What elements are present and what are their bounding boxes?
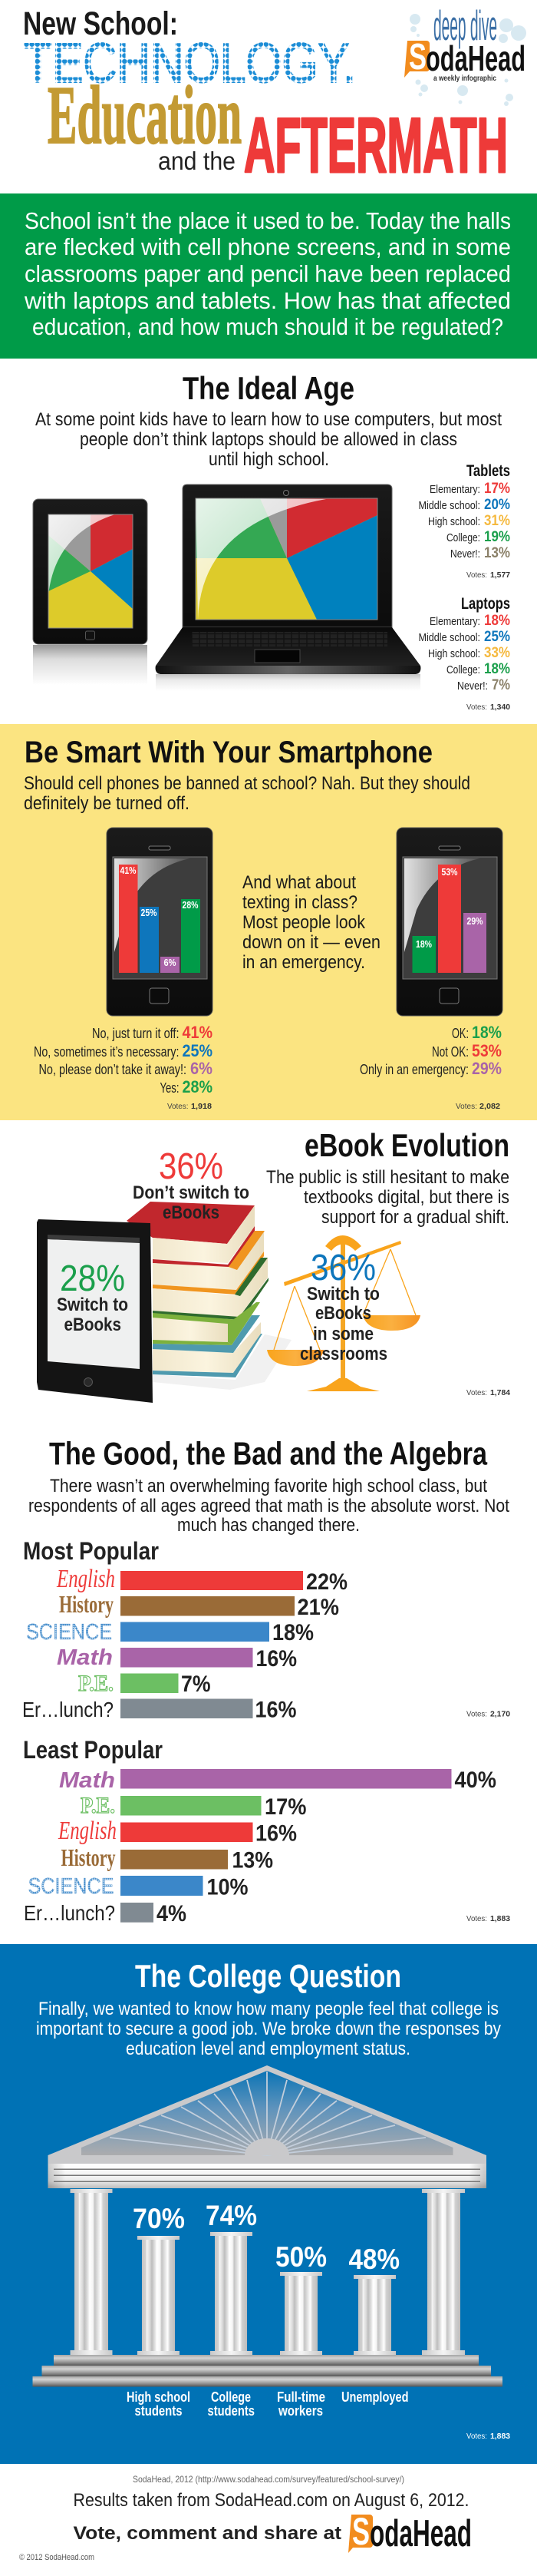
stat: 36 percent some classrooms: classrooms [300,1344,387,1364]
chart: phone bar chart, banned: 28% [183,899,199,911]
chart: most popular: SCIENCE [26,1620,112,1645]
stats: tablets: High school: [428,516,480,528]
text: algebra intro [28,1476,509,1536]
panel: the college question [0,1944,537,2464]
title: and the [158,147,236,175]
chart: phone bar chart, texting: 29% [466,915,483,927]
chart: column unemployed: Unemployed [341,2389,408,2405]
stats: laptops: 25% [484,629,510,645]
chart: least popular [23,1736,510,1926]
icon: ereader [37,1219,153,1403]
chart: column college students: College [211,2389,251,2405]
legend: banned results: 6% [190,1059,212,1078]
legend: texting results: OK: [452,1026,469,1041]
chart: most popular [22,1537,510,1723]
chart: most popular: 22% [306,1569,348,1595]
chart: column high school students: students [135,2402,183,2419]
stats: tablets: Tablets [466,462,510,480]
chart: column high school students: 70% [133,2203,185,2234]
chart: phone bar chart, texting [397,828,502,1016]
title: Education [48,70,242,161]
title [23,5,508,189]
text: smartphone intro [24,773,470,814]
legend: texting results: Votes: [456,1103,477,1111]
heading: smartphone: Be Smart With Your Smartphone [25,736,433,769]
stats: laptops: Elementary: [430,616,480,628]
stat: 36 percent some classrooms: in some [313,1324,374,1344]
stats: tablets: Middle school: [419,500,480,512]
votes: ebook: Votes: [466,1389,487,1397]
stats: laptops [419,595,510,712]
stats: laptops: Never!: [457,680,488,693]
logo: SodaHead: odaHead [370,2513,472,2555]
icon: temple pediment [48,2065,486,2188]
text: ebook intro: support for a gradual shift. [321,1207,509,1228]
text: ebook intro: The public is still hesitant to make [266,1167,509,1188]
chart: least popular: 13% [232,1847,273,1873]
chart: least popular: SCIENCE [28,1874,114,1899]
panel: be smart with your smartphone [0,724,537,1120]
votes: ebook [466,1389,510,1397]
legend: banned results: Votes: [167,1103,189,1111]
stat: 36 percent don't switch: Don’t switch to [133,1182,249,1203]
legend: texting results [360,1023,502,1111]
text: texting in class: down on it — even [242,932,381,953]
chart: column full-time workers: workers [278,2402,323,2419]
icon: temple outer columns and steps [32,2189,502,2386]
votes: college [466,2432,510,2441]
stats: tablets: 1,577 [490,571,510,580]
text: ebook intro [266,1167,509,1228]
footer [19,2474,472,2562]
logo: SodaHead [348,2510,472,2555]
chart: least popular: Er…lunch? [24,1901,115,1925]
panel: ebook evolution [37,1127,510,1403]
legend: banned results: Yes: [160,1080,180,1096]
legend: texting results: 29% [472,1059,502,1078]
chart: least popular: History [61,1844,115,1871]
text: texting in class: in an emergency. [242,952,365,973]
votes: college: 1,883 [490,2432,510,2441]
chart: column college students: students [207,2402,255,2419]
text: ideal age intro [35,409,502,470]
stat: 28 percent switch: eBooks [64,1314,121,1335]
chart: column college students [206,2200,257,2419]
chart: most popular: English [56,1565,115,1593]
icon: stack of books [127,1202,292,1390]
chart: column college students: 74% [206,2200,257,2231]
votes: college: Votes: [466,2432,487,2441]
icon: tablet pie chart [33,499,147,685]
panel: intro: with laptops and tablets. How has that affected [24,287,511,314]
title: New School: [23,5,178,42]
legend: banned results: 1,918 [191,1103,212,1111]
chart: most popular: 7% [181,1672,210,1697]
chart: column unemployed [341,2244,408,2405]
stat: 36 percent some classrooms: 36% [311,1248,376,1288]
stats: laptops: 7% [492,677,510,693]
legend: banned results: 28% [183,1077,212,1096]
legend: banned results: 25% [183,1041,212,1060]
text: results date: Results taken from SodaHead.com on August 6, 2012. [74,2490,469,2511]
panel: intro: are flecked with cell phone screens, and in some [25,233,511,260]
stats: tablets: Votes: [466,571,487,580]
logo: deep dive SodaHead [404,2,526,106]
panel: the ideal age [33,370,510,712]
votes: ebook: 1,784 [490,1389,510,1397]
chart: most popular: Er…lunch? [22,1698,114,1721]
legend: texting results: 2,082 [479,1103,500,1111]
chart: column full-time workers: Full-time [277,2389,325,2405]
legend: texting results: Only in an emergency: [360,1062,469,1077]
chart: least popular: 17% [265,1794,307,1820]
chart: most popular: 2,170 [490,1711,510,1718]
stat: 36 percent some classrooms: Switch to [307,1284,380,1305]
text: texting in class: And what about [242,872,356,893]
panel: intro: education, and how much should it be regulated? [32,313,503,340]
chart: least popular: P.E. [81,1793,115,1818]
text: source: SodaHead, 2012 (http://www.sodahead.com/survey/featured/school-survey/) [133,2474,404,2485]
stat: 36 percent some classrooms: eBooks [315,1303,371,1324]
stats: tablets: College: [446,532,480,544]
title: TECHNOLOGY. [24,33,356,94]
logo: deep dive SodaHead: S [409,37,427,78]
chart: least popular: 4% [156,1901,186,1926]
text: college intro [36,1999,501,2059]
icon: scales [267,1235,420,1391]
text: ideal age intro: until high school. [209,449,329,470]
stats: tablets: Never!: [450,548,480,561]
text: texting in class [242,872,381,973]
chart: most popular: 16% [256,1646,297,1672]
stats: laptops: High school: [428,648,480,660]
stat: 36 percent some classrooms [300,1248,387,1364]
stats: tablets: 13% [484,545,510,561]
stats: tablets: 20% [484,497,510,513]
text: ebook intro: textbooks digital, but there is [304,1187,509,1208]
legend: texting results: Not OK: [432,1044,469,1060]
chart: most popular: 16% [255,1697,296,1723]
legend: banned results: No, please don’t take it away!: [38,1062,186,1077]
stat: 28 percent switch [57,1258,128,1335]
stat: 36 percent don't switch: 36% [159,1146,223,1187]
stats: laptops: Laptops [461,595,510,613]
heading: college question: The College Question [135,1958,401,1994]
chart: least popular: 10% [207,1875,249,1900]
legend: banned results [34,1023,212,1111]
chart: most popular: Votes: [466,1711,487,1718]
chart: least popular: 1,883 [490,1915,510,1923]
text: algebra intro: There wasn’t an overwhelming favorite high school class, but [50,1476,487,1496]
heading: the ideal age: The Ideal Age [183,370,354,406]
text: smartphone intro: Should cell phones be banned at school? Nah. But they should [24,773,470,794]
stat: 36 percent don't switch: eBooks [163,1202,219,1223]
chart: column full-time workers [275,2241,327,2419]
logo: SodaHead: S [352,2510,370,2553]
stats: laptops: College: [446,664,480,676]
chart: column high school students [127,2203,190,2419]
chart: least popular: Least Popular [23,1736,163,1764]
logo: deep dive SodaHead: a weekly infographic [433,74,496,83]
text: texting in class: Most people look [242,912,366,933]
icon: laptop pie chart [156,484,420,691]
panel: the good, the bad and the algebra [22,1436,510,1926]
chart: most popular: P.E. [78,1671,114,1696]
chart: most popular: 18% [272,1620,314,1645]
text: ideal age intro: people don’t think laptops should be allowed in class [80,429,457,450]
chart: least popular: 40% [454,1767,496,1793]
chart: most popular: Math [57,1645,113,1670]
text: copyright: © 2012 SodaHead.com [19,2553,94,2562]
chart: least popular: 16% [255,1821,297,1847]
legend: banned results: No, just turn it off: [92,1026,180,1041]
chart: column high school students: High school [127,2389,190,2405]
chart: column full-time workers: 50% [275,2241,327,2273]
chart: phone bar chart, banned: 25% [141,907,157,918]
chart: phone bar chart, banned [107,828,212,1016]
stat: 28 percent switch: 28% [60,1258,125,1299]
text: algebra intro: much has changed there. [177,1515,360,1536]
stats: laptops: Middle school: [419,632,480,644]
stats: laptops: 33% [484,645,510,661]
panel: intro [0,193,537,359]
legend: banned results: No, sometimes it’s necessary: [34,1044,180,1060]
chart: phone bar chart, banned: 41% [120,865,137,876]
text: college intro: education level and employment status. [126,2039,410,2059]
stats: tablets: 19% [484,529,510,545]
legend: banned results: 41% [183,1023,212,1042]
stat: 36 percent don't switch [133,1146,249,1223]
stats: tablets: 31% [484,513,510,529]
stats: tablets: 17% [484,481,510,497]
chart: least popular: Votes: [466,1915,487,1923]
stats: laptops: 1,340 [490,703,510,712]
chart: phone bar chart, texting: 18% [416,938,432,950]
stats: tablets: Elementary: [430,484,480,496]
text: call to action: Vote, comment and share at [74,2523,341,2544]
chart: most popular: Most Popular [23,1537,159,1565]
chart: column unemployed: 48% [348,2244,400,2275]
chart: least popular: English [58,1817,117,1845]
chart: most popular: History [59,1590,114,1618]
chart: phone bar chart, banned: 6% [164,957,176,968]
stats: laptops: Votes: [466,703,487,712]
stat: 28 percent switch: Switch to [57,1295,128,1315]
stats: tablets [419,462,510,580]
legend: texting results: 53% [472,1041,502,1060]
chart: most popular: 21% [298,1595,339,1620]
panel: intro: classrooms paper and pencil have been replaced [25,260,511,287]
text: texting in class: texting in class? [242,892,357,913]
chart: least popular: Math [59,1768,115,1793]
chart: phone bar chart, texting: 53% [442,866,458,878]
text: smartphone intro: definitely be turned off. [24,793,189,814]
stats: laptops: 18% [484,613,510,629]
legend: texting results: 18% [472,1023,502,1042]
stats: laptops: 18% [484,661,510,677]
